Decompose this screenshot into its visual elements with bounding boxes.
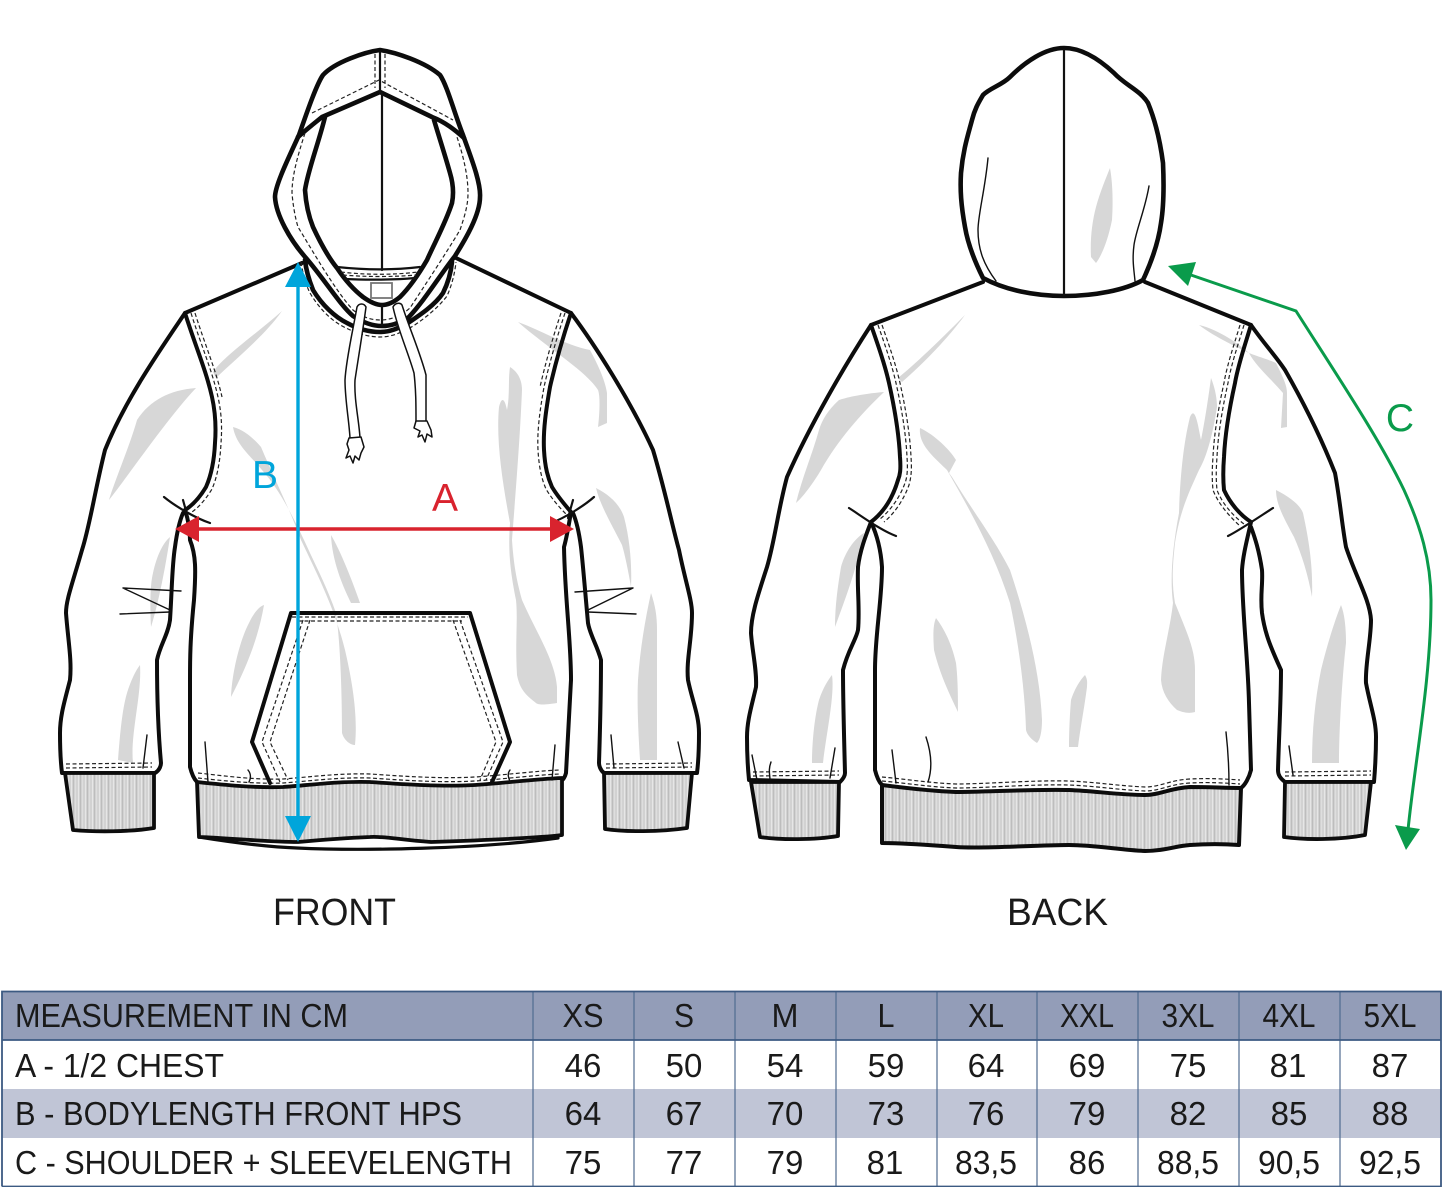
- row C: shoulder and sleeve length: 75: [565, 1144, 601, 1181]
- row A: half chest: 59: [868, 1047, 904, 1084]
- right drawstring: [393, 303, 432, 442]
- row C: shoulder and sleeve length: 88,5: [1157, 1144, 1219, 1181]
- back hem stitching: [753, 771, 1371, 791]
- row B: body length: 76: [968, 1095, 1004, 1132]
- header row: XS: [562, 997, 604, 1034]
- row C: shoulder and sleeve length: 83,5: [955, 1144, 1017, 1181]
- underarm creases: [164, 497, 594, 523]
- row C: shoulder and sleeve length: 90,5: [1258, 1144, 1320, 1181]
- front left sleeve: [60, 313, 185, 773]
- back hood seam: [1063, 50, 1065, 295]
- header row: 4XL: [1262, 997, 1316, 1034]
- front shading folds: [109, 311, 657, 763]
- row A: half chest: 75: [1170, 1047, 1206, 1084]
- hood opening: [305, 117, 453, 305]
- caption BACK: BACK: [1007, 892, 1108, 934]
- header row: XL: [968, 997, 1004, 1034]
- neck inset stitching: [341, 272, 418, 276]
- measurement arrow C: shoulder and sleeve: [1168, 262, 1431, 850]
- right armhole stitching: [538, 313, 566, 514]
- left cuff: [65, 773, 154, 831]
- row B: body length: 73: [868, 1095, 904, 1132]
- row A: half chest: [15, 1047, 1408, 1084]
- front kangaroo pocket: [252, 613, 510, 783]
- row A: half chest: 50: [666, 1047, 702, 1084]
- collar stitching: [301, 262, 456, 337]
- row C: shoulder and sleeve length: [15, 1144, 1421, 1181]
- table grid: [533, 991, 1340, 1187]
- row A: half chest: A - 1/2 CHEST: [15, 1047, 224, 1084]
- hood neck inset: [337, 267, 420, 280]
- row C: shoulder and sleeve length: 77: [666, 1144, 702, 1181]
- row B: body length: 79: [1069, 1095, 1105, 1132]
- header row: 5XL: [1364, 997, 1416, 1034]
- table row backgrounds: [2, 991, 1441, 1187]
- row A: half chest: 54: [767, 1047, 803, 1084]
- front hem lower curve: [199, 837, 558, 849]
- hem pull lines: [143, 735, 684, 782]
- back shading folds: [796, 168, 1346, 763]
- hood centre seam: [380, 52, 382, 325]
- left sleeve pleat: [120, 588, 181, 614]
- header row: [15, 997, 1416, 1034]
- hood collar: [305, 260, 452, 332]
- row B: body length: 64: [565, 1095, 601, 1132]
- back pull lines: [752, 732, 1293, 785]
- table border: [2, 992, 1441, 1186]
- header row: 3XL: [1162, 997, 1214, 1034]
- left drawstring: [345, 304, 366, 463]
- row A: half chest: 87: [1372, 1047, 1408, 1084]
- front hem rib: [197, 778, 562, 842]
- right sleeve pleat: [575, 588, 636, 614]
- row A: half chest: 64: [968, 1047, 1004, 1084]
- back underarm creases: [849, 508, 1273, 536]
- back hood outline: [961, 48, 1164, 296]
- row C: shoulder and sleeve length: 92,5: [1359, 1144, 1421, 1181]
- row B: body length: 85: [1271, 1095, 1307, 1132]
- hood band: [298, 92, 464, 138]
- hem stitching: [66, 763, 692, 783]
- neck label: [371, 283, 392, 298]
- back right cuff: [1284, 782, 1371, 839]
- header row: M: [772, 997, 798, 1034]
- back right sleeve: [1251, 325, 1376, 782]
- back hood folds: [978, 158, 1149, 281]
- row A: half chest: 81: [1270, 1047, 1306, 1084]
- right cuff: [604, 773, 692, 831]
- label B: B: [252, 454, 278, 497]
- back armhole stitching: [878, 325, 1244, 526]
- measurement arrow A: chest: [175, 516, 574, 542]
- label C: C: [1386, 397, 1414, 440]
- row B: body length: 82: [1170, 1095, 1206, 1132]
- hood stitching: [292, 54, 468, 320]
- label A: A: [432, 477, 458, 520]
- front right sleeve: [571, 313, 699, 773]
- measurement arrow B: body length: [285, 262, 311, 842]
- front hoodie illustration: [60, 50, 699, 849]
- front body sides and shoulders: [185, 258, 571, 782]
- header row: S: [674, 997, 694, 1034]
- back left sleeve: [747, 325, 871, 782]
- hood outline: [275, 50, 480, 326]
- row A: half chest: 46: [565, 1047, 601, 1084]
- back body sides and shoulders: [871, 282, 1251, 788]
- header row: L: [878, 997, 894, 1034]
- row C: shoulder and sleeve length: C - SHOULDER + SLEEVELENGTH: [15, 1144, 512, 1181]
- row C: shoulder and sleeve length: 86: [1069, 1144, 1105, 1181]
- row C: shoulder and sleeve length: 79: [767, 1144, 803, 1181]
- row B: body length: 88: [1372, 1095, 1408, 1132]
- row B: body length: [15, 1095, 1408, 1132]
- header row: XXL: [1060, 997, 1114, 1034]
- row A: half chest: 69: [1069, 1047, 1105, 1084]
- back hoodie illustration: [747, 48, 1376, 851]
- row B: body length: B - BODYLENGTH FRONT HPS: [15, 1095, 462, 1132]
- header row: MEASUREMENT IN CM: [15, 997, 348, 1034]
- back hem rib: [882, 785, 1241, 851]
- caption FRONT: FRONT: [273, 892, 396, 934]
- size table: [2, 991, 1441, 1187]
- row B: body length: 70: [767, 1095, 803, 1132]
- front armhole stitching: [191, 313, 222, 512]
- row C: shoulder and sleeve length: 81: [867, 1144, 903, 1181]
- row B: body length: 67: [666, 1095, 702, 1132]
- back left cuff: [751, 782, 839, 839]
